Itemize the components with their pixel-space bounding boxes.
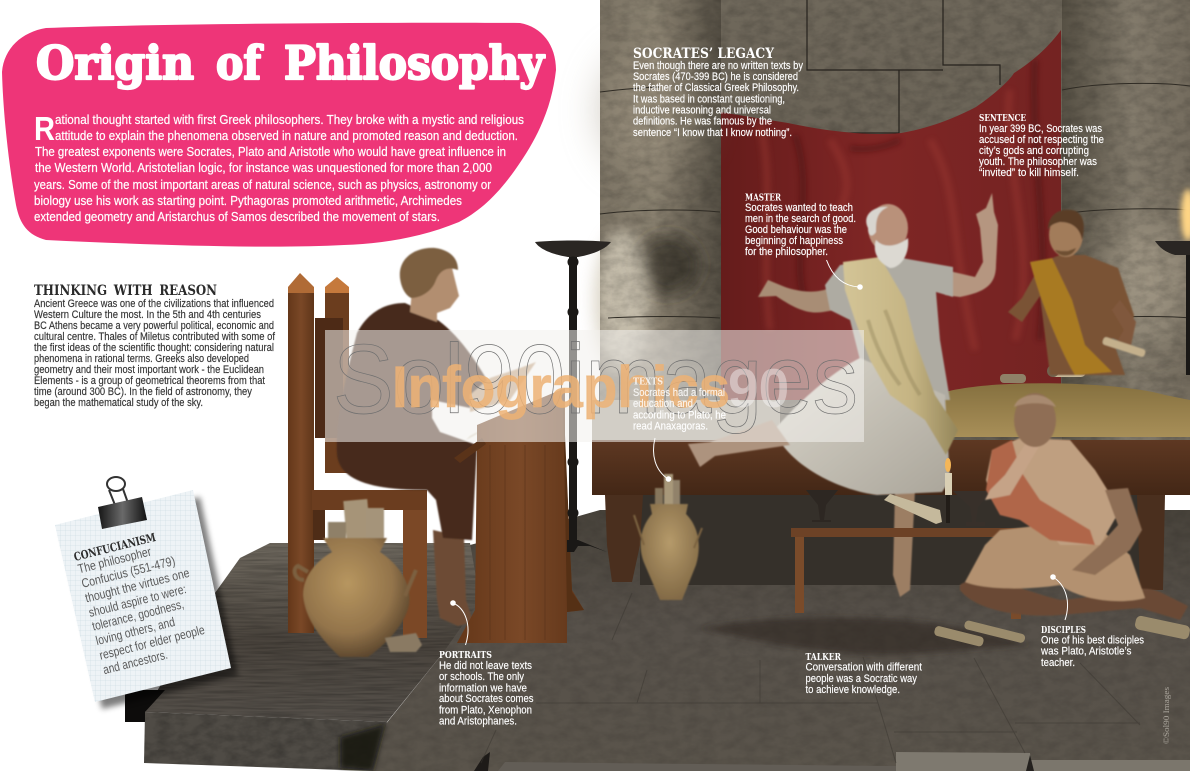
callout: disciples: One of his best disciples — [1041, 634, 1145, 646]
callout: portraits: PORTRAITS — [439, 650, 492, 661]
vase with scrolls, left — [295, 499, 422, 657]
callout: sentence — [979, 113, 1104, 179]
callout: sentence: In year 399 BC, Socrates was — [979, 123, 1103, 135]
watermark 90: 90 — [728, 357, 789, 419]
intro paragraph: years. Some of the most important areas of natural science, such as physics, astronomy or — [34, 177, 492, 192]
card — [55, 490, 231, 702]
bed legs — [605, 495, 1165, 590]
callout: sentence: city’s gods and corrupting — [979, 145, 1089, 157]
legs — [960, 580, 1188, 620]
callout: Socrates' legacy: sentence “I know that I know nothing”. — [633, 127, 792, 139]
callout: master: Good behaviour was the — [745, 224, 847, 236]
head — [1014, 393, 1056, 447]
black block under card — [125, 690, 165, 722]
back shadow under bed — [640, 495, 1140, 585]
thinking body: Western Culture the most. In the 5th and 4th centuries — [34, 309, 261, 321]
student figure — [337, 248, 536, 626]
man sash — [1030, 258, 1112, 375]
callout: Socrates' legacy: SOCRATES’ LEGACY — [633, 46, 774, 62]
callout: Socrates' legacy: the father of Classical Greek Philosophy. — [633, 82, 799, 94]
callout: portraits: He did not leave texts — [439, 660, 533, 672]
card text: thought the virtues one — [83, 565, 191, 605]
bed frame — [592, 440, 1190, 495]
thinking body: time (around 300 BC). In the field of astronomy, they — [34, 386, 252, 398]
card text: The philosopher — [76, 543, 153, 576]
callout: master: MASTER — [745, 192, 781, 204]
callout: master: men in the search of good. — [745, 213, 856, 225]
callout: portraits: about Socrates comes — [439, 693, 534, 705]
bent arm — [985, 440, 1040, 500]
callout: master: for the philosopher. — [745, 246, 828, 258]
bed mattress left — [592, 400, 780, 442]
callout: Socrates' legacy: It was based in constant questioning, — [633, 94, 785, 106]
thinking body: BC Athens became a very powerful political, economic and — [34, 320, 274, 332]
watermark — [325, 324, 864, 442]
raised platform — [145, 543, 480, 722]
callout: Socrates' legacy: Even though there are no written texts by — [633, 60, 804, 72]
callout: talker: Conversation with different — [806, 662, 922, 674]
callout: Socrates' legacy: definitions. He was famous by the — [633, 116, 772, 128]
left pillar — [594, 0, 721, 440]
callout: sentence: accused of not respecting the — [979, 134, 1104, 146]
thinking body: cultural centre. Thales of Miletus contributed with some of — [34, 331, 276, 343]
vase with scrolls, right — [634, 474, 702, 600]
intro paragraph: The greatest exponents were Socrates, Plato and Aristotle who would have great influence in — [35, 144, 506, 159]
card text: respect for elder people — [98, 622, 206, 663]
thinking body: Ancient Greece was one of the civilizations that influenced — [34, 298, 274, 310]
intro paragraph: ational thought started with first Greek philosophers. They broke with a mystic and religious — [55, 112, 524, 127]
tunic — [825, 257, 953, 400]
student legs — [433, 530, 473, 626]
student hands and scroll — [470, 362, 536, 412]
candle — [945, 458, 952, 523]
callout: master: beginning of happiness — [745, 235, 844, 247]
callout: disciples: was Plato, Aristotle’s — [1040, 646, 1132, 658]
man arm with scroll — [1112, 300, 1136, 350]
callout: sentence: SENTENCE — [979, 113, 1026, 124]
callout: Socrates' legacy: inductive reasoning and universal — [633, 104, 771, 116]
right arm — [1072, 488, 1142, 575]
card shadow — [62, 497, 238, 709]
rug stain — [700, 618, 1030, 655]
callout: disciples — [1040, 574, 1145, 669]
portraits pointer — [450, 600, 468, 645]
thinking body — [34, 298, 276, 409]
standing leg — [893, 490, 915, 597]
orange sash — [986, 440, 1095, 545]
intro paragraph: biology use his work as starting point. Pythagoras promoted arithmetic, Archimedes — [34, 193, 462, 208]
card text: CONFUCIANISM — [72, 530, 157, 564]
callout: disciples: teacher. — [1041, 657, 1075, 669]
callout: portraits: and Aristophanes. — [439, 716, 517, 728]
callout: texts: read Anaxagoras. — [633, 420, 708, 432]
texts pointer — [654, 438, 671, 482]
callout: texts: education and — [633, 398, 693, 410]
scroll on table — [884, 494, 942, 524]
callout: texts: TEXTS — [633, 376, 663, 388]
thinking heading: THINKING WITH REASON — [34, 283, 217, 299]
callout: portraits: from Plato, Xenophon — [439, 704, 532, 716]
thinking body: Elements - is a group of geometrical theorems from that — [34, 375, 265, 387]
small table — [791, 458, 1026, 619]
callout: master — [745, 192, 863, 290]
thinking body: the first ideas of the scientific thought: considering natural — [34, 342, 274, 354]
watermark Infographics: Infographics — [392, 355, 730, 420]
left arm — [758, 280, 835, 313]
callout: texts — [633, 376, 726, 482]
peach robe — [965, 520, 1145, 601]
watermark panel — [325, 330, 864, 442]
thinking with reason — [34, 283, 276, 409]
white robe — [774, 358, 950, 495]
scrolls on bed — [1000, 365, 1086, 383]
student robe — [337, 303, 490, 540]
callout: talker: TALKER — [806, 652, 841, 663]
intro paragraph: R — [34, 110, 55, 147]
floor scrolls — [934, 615, 1190, 647]
right goblet — [953, 491, 992, 526]
man body — [1008, 255, 1134, 375]
student head — [400, 248, 459, 322]
torso — [986, 438, 1120, 545]
callout: texts: Socrates had a formal — [633, 387, 725, 399]
floor lamp — [535, 240, 611, 552]
callout: sentence: “invited” to kill himself. — [979, 167, 1079, 179]
title: Origin — [36, 36, 194, 90]
head and beard — [866, 204, 908, 268]
foot and leg on bed — [688, 420, 790, 467]
callout: portraits: information we have — [439, 682, 527, 694]
disciples pointer — [1050, 574, 1068, 620]
callout: Socrates' legacy — [633, 46, 804, 139]
callout: talker — [806, 652, 922, 696]
man head — [1048, 210, 1084, 257]
title — [36, 36, 545, 90]
card text — [72, 524, 210, 677]
thinking body: phenomena in rational terms. Greeks also developed — [34, 353, 249, 365]
card text: and ancestors. — [101, 647, 169, 677]
callout: disciples: DISCIPLES — [1041, 625, 1086, 636]
main floor — [125, 510, 1190, 771]
right torch — [1155, 189, 1190, 375]
second man standing — [1008, 210, 1146, 375]
callout: talker: people was a Socratic way — [806, 673, 918, 685]
chair — [288, 273, 427, 638]
card text: should aspire to were: — [87, 581, 188, 620]
left goblet — [806, 490, 838, 522]
intro paragraph — [34, 110, 524, 224]
callout: texts: according to Plato, he — [633, 410, 726, 422]
platform front face — [144, 712, 387, 771]
Socrates figure — [688, 193, 998, 597]
bottom light strips — [896, 752, 1032, 771]
thinking body: geometry and their most important work - the Euclidean — [34, 364, 264, 376]
bed — [592, 383, 1190, 590]
card text: Confucius (551-479) — [80, 553, 177, 591]
intro paragraph: attitude to explain the phenomena observed in nature and promoted reason and deduction. — [55, 128, 518, 143]
card text: tolerance, goodness, — [90, 596, 185, 634]
master pointer — [826, 260, 863, 290]
callout: master: Socrates wanted to teach — [745, 202, 853, 214]
note card: Confucianism — [55, 477, 238, 709]
stone wall — [600, 0, 1190, 440]
icon: binder clip — [98, 477, 147, 529]
title blob — [2, 23, 556, 247]
callout: talker: to achieve knowledge. — [806, 684, 900, 696]
title: Philosophy — [284, 36, 545, 90]
intro paragraph: extended geometry and Aristarchus of Samos described the movement of stars. — [34, 209, 440, 224]
credit: ©Sol90 Images — [1161, 687, 1171, 744]
callout: sentence: youth. The philosopher was — [979, 156, 1098, 168]
watermark Sol90 images: Sol90images — [333, 324, 858, 434]
paper — [466, 404, 530, 440]
callout: portraits — [439, 600, 534, 728]
toga — [843, 257, 958, 455]
intro paragraph: the Western World. Aristotelian logic, for instance was unquestioned for more than 2,000 — [35, 160, 492, 175]
disciple figure — [960, 393, 1188, 620]
thinking body: began the mathematical study of the sky. — [34, 397, 203, 409]
bed mattress right — [945, 383, 1190, 437]
writing desk — [454, 388, 584, 643]
right pillar — [1062, 0, 1190, 440]
callout: portraits: or schools. The only — [439, 671, 525, 683]
red curtain — [720, 30, 1061, 400]
card text: loving others, and — [94, 614, 176, 648]
callout: Socrates' legacy: Socrates (470-399 BC) he is considered — [633, 71, 798, 83]
raised arm — [945, 193, 998, 297]
title: of — [216, 36, 264, 90]
